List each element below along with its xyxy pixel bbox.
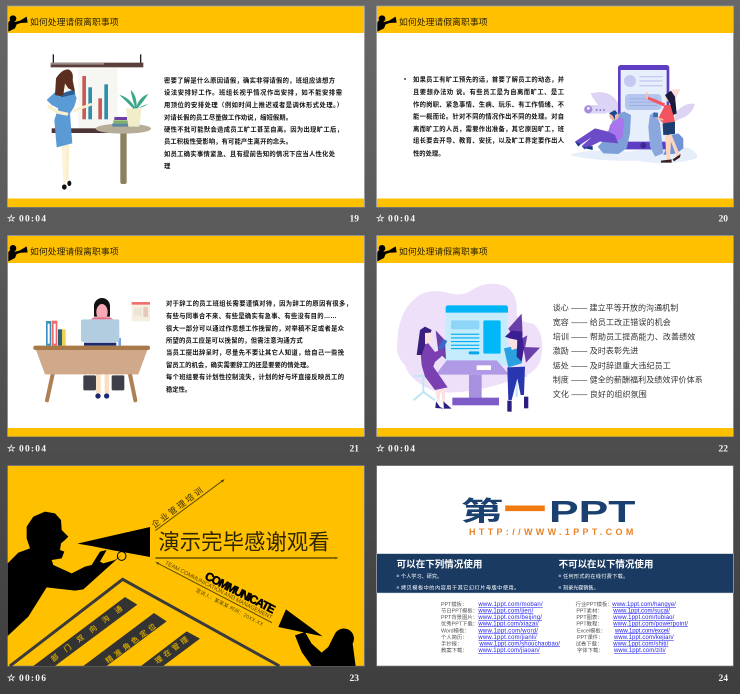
slide number 21: 21 bbox=[350, 444, 359, 454]
left link list: 节日PPT模板： bbox=[441, 606, 478, 614]
slide 20 timer: 00:04 bbox=[388, 214, 415, 224]
heading: 如何处理请假离职事项 bbox=[30, 16, 119, 27]
text block: 所望的员工应是可以挽留的，但需注意沟通方式 bbox=[166, 336, 303, 345]
allowed uses bbox=[397, 559, 519, 592]
closing title: 演示完毕感谢观看 bbox=[158, 530, 330, 554]
right link list: www.1ppt.com/kejian/ bbox=[613, 635, 674, 641]
arrow line with english label: TEAM COMMUNICATION AND MANAGEMENT bbox=[164, 560, 273, 621]
right link list: 字体下载： bbox=[577, 646, 604, 654]
text block: 当员工提出辞呈时，尽量先不要让其它人知道，给自己一些挽 bbox=[166, 348, 345, 357]
slide 21 timer bbox=[7, 444, 46, 454]
right link list: www.1ppt.com/tubiao/ bbox=[612, 615, 675, 621]
left link list: PPT模板： bbox=[441, 600, 467, 608]
left link list: www.1ppt.com/moban/ bbox=[477, 602, 543, 608]
right link list: www.1ppt.com/hangye/ bbox=[611, 602, 676, 608]
stripe: 部门双向沟通: 部门双向沟通 bbox=[49, 603, 125, 664]
allowed uses: 可以在下列情况使用 bbox=[397, 559, 482, 571]
slide 20 timer bbox=[376, 214, 415, 224]
slide 22 timer: 00:04 bbox=[388, 444, 415, 454]
slide 20 timer: ☆ bbox=[376, 214, 385, 224]
slide number 23: 23 bbox=[350, 674, 359, 684]
panel: slide 21 bbox=[8, 236, 364, 436]
prohibited uses: 任何形式的在线付费下载。 bbox=[563, 572, 628, 580]
left link list: 优秀PPT下载： bbox=[441, 619, 478, 627]
text block bbox=[404, 74, 565, 157]
slide 23 timer: 00:06 bbox=[19, 674, 46, 684]
text block: 设法安排好工作。班组长视乎情况作出安排，如不能安排需 bbox=[164, 88, 342, 97]
right link list: www.1ppt.com/ziti/ bbox=[613, 648, 666, 654]
illustration: people with giant phone bbox=[570, 65, 697, 163]
right link list: PPT教程： bbox=[576, 619, 603, 627]
right link list: www.1ppt.com/shiti/ bbox=[612, 641, 669, 647]
silhouette: man with small megaphone bbox=[278, 609, 356, 666]
left link list bbox=[441, 600, 560, 654]
slide number 22: 22 bbox=[718, 444, 728, 454]
text block: 很大一部分可以通过作思想工作挽留的，对举稿不足或者是众 bbox=[166, 323, 345, 332]
right link list: PPT图表： bbox=[576, 613, 603, 621]
panel: slide 22 bbox=[376, 236, 734, 436]
left link list: Word模板： bbox=[441, 626, 470, 634]
left link list: 个人简历： bbox=[441, 633, 468, 641]
text block: 用顶位的安排处理（例如时间上推迟或者是调休形式处理。） bbox=[164, 100, 343, 109]
text list: 谈心 —— 建立平等开放的沟通机制 bbox=[553, 303, 678, 313]
right link list: 试卷下载： bbox=[576, 639, 602, 647]
logo: 第一PPT bbox=[461, 487, 635, 535]
slide number 20: 20 bbox=[718, 214, 728, 224]
slide 19 timer: 00:04 bbox=[19, 214, 46, 224]
panel: slide 23 bbox=[8, 466, 364, 666]
text block: 稳定性。 bbox=[166, 384, 191, 393]
slide 22 timer: ☆ bbox=[376, 444, 385, 454]
illustration: woman at desk bbox=[33, 298, 150, 400]
text block: 且要想办法劝 说。有些员工是为自离而旷工、是工 bbox=[413, 87, 565, 96]
right link list bbox=[576, 600, 688, 654]
text list bbox=[553, 303, 703, 399]
text block: 作的岗职、紧急事情、生病、玩乐、有工作情绪、不 bbox=[413, 99, 565, 108]
left link list: www.1ppt.com/beijing/ bbox=[477, 615, 542, 621]
left link list: 教案下载： bbox=[441, 646, 468, 654]
text block: 离而旷工的人员，需要作出准备，其它原因旷工，班 bbox=[413, 124, 565, 133]
right link list: PPT课件： bbox=[577, 633, 603, 641]
left link list: www.1ppt.com/jianli/ bbox=[477, 635, 537, 641]
illustration: meeting at table bbox=[397, 284, 542, 412]
slide 23 timer: ☆ bbox=[7, 673, 16, 684]
text list: 宽容 —— 给员工改正错误的机会 bbox=[553, 317, 671, 327]
slide 21 timer: ☆ bbox=[7, 444, 16, 454]
stripe: 精准角色定位 bbox=[83, 613, 167, 666]
prohibited uses: 不可以在以下情况使用 bbox=[559, 559, 653, 571]
slide 22 timer bbox=[376, 444, 415, 454]
text list: 激励 —— 及时表彰先进 bbox=[553, 346, 638, 356]
panel: slide 19 bbox=[8, 6, 364, 207]
arrow line with training label: 企业管理培训 bbox=[150, 485, 204, 530]
text block: 硬性不批可能默会造成员工旷工甚至自离。因为出现旷工后， bbox=[164, 125, 343, 134]
slide 23 timer bbox=[7, 673, 46, 684]
text list: 制度 —— 健全的薪酬福利及绩效评价体系 bbox=[553, 375, 703, 385]
panel: slide 24 bbox=[377, 466, 733, 666]
text block: 留员工的机会，确实需要辞工的还是要要的情处理。 bbox=[166, 360, 313, 369]
text block: 组长要去开导、教育、安抚，以及旷工界定要作出人 bbox=[413, 136, 565, 145]
text block: 如果员工有旷工预先的话，首要了解员工的动态，并 bbox=[413, 74, 565, 84]
text block: 密要了解是什么原因请假，确实非得请假的，班组应该想方 bbox=[164, 75, 335, 84]
allowed uses: 拷贝模板中的内容用于其它幻灯片母版中使用。 bbox=[401, 584, 519, 592]
roof outline bbox=[10, 579, 279, 666]
left link list: 手抄报： bbox=[441, 639, 462, 647]
illustration: woman presenting chart bbox=[47, 54, 151, 190]
slide 19 timer: ☆ bbox=[7, 214, 16, 224]
text block: 有些与同事合不来、有些是确实有急事、有些没有目的…… bbox=[166, 311, 337, 320]
right link list: Excel模板： bbox=[577, 626, 606, 634]
title arrow bbox=[155, 557, 339, 559]
icon: megaphone man bbox=[377, 245, 397, 261]
left link list: PPT背景图片： bbox=[441, 613, 478, 621]
communicate wordmark: COMMUNICATE bbox=[203, 570, 278, 617]
heading: 如何处理请假离职事项 bbox=[399, 16, 488, 27]
heading: 如何处理请假离职事项 bbox=[399, 246, 488, 256]
text list: 培训 —— 帮助员工提高能力、改善绩效 bbox=[553, 331, 695, 341]
text list: 惩处 —— 及时辞退重大违纪员工 bbox=[553, 360, 671, 370]
text block: 能一概而论。针对不同的情况作出不同的处理。对自 bbox=[413, 112, 564, 121]
logo: 第一PPT: PPT bbox=[549, 495, 635, 529]
stripe: 理在管理 bbox=[141, 631, 200, 666]
text block: 如员工确实事情紧急、且有提前告知的情况下应当人性化处 bbox=[164, 149, 336, 158]
text block bbox=[166, 299, 352, 393]
text block: 性的处理。 bbox=[413, 148, 444, 157]
left link list: www.1ppt.com/word/ bbox=[477, 628, 538, 634]
left link list: www.1ppt.com/xiazai/ bbox=[477, 621, 539, 627]
slide 19 timer bbox=[7, 214, 46, 224]
arrow line with training label bbox=[150, 479, 225, 531]
slide 21 timer: 00:04 bbox=[19, 444, 46, 454]
heading: 如何处理请假离职事项 bbox=[30, 246, 119, 256]
logo: 第一PPT: 第 bbox=[461, 497, 503, 527]
stripe: 部门双向沟通 bbox=[33, 597, 137, 666]
right link list: www.1ppt.com/powerpoint/ bbox=[612, 621, 688, 627]
slide number 19: 19 bbox=[350, 214, 359, 224]
text block: 每个班组要有计划性控制流失，计划的好与坏直接反映员工的 bbox=[166, 372, 344, 381]
text block: 员工积极性受影响，有可能产生离开的念头。 bbox=[164, 137, 292, 146]
icon: megaphone man bbox=[8, 245, 28, 261]
presenter line: 宣讲人：某某某 时间：20XX.XX bbox=[194, 587, 265, 628]
left link list: www.1ppt.com/jieri/ bbox=[477, 608, 534, 614]
right link list: www.1ppt.com/excel/ bbox=[614, 628, 670, 634]
stripe: 精准角色定位: 精准角色定位 bbox=[104, 622, 158, 665]
right link list: 行业PPT模板： bbox=[576, 600, 613, 608]
icon: megaphone man bbox=[377, 15, 397, 32]
right link list: www.1ppt.com/sucai/ bbox=[612, 608, 670, 614]
allowed uses: 个人学习、研究。 bbox=[401, 572, 442, 580]
silhouette: man with large megaphone bbox=[8, 512, 150, 636]
logo: 第一PPT: 一 bbox=[504, 487, 546, 535]
text block bbox=[164, 75, 343, 170]
logo url: HTTP://WWW.1PPT.COM bbox=[469, 527, 633, 537]
icon: megaphone man bbox=[8, 15, 28, 32]
right link list: PPT素材： bbox=[576, 606, 603, 614]
navy usage band bbox=[377, 554, 733, 593]
stripe: 理在管理: 理在管理 bbox=[153, 634, 190, 666]
text block: 对请长假的员工尽量做工作劝说，缩短假期。 bbox=[164, 112, 292, 121]
prohibited uses bbox=[559, 559, 653, 592]
left link list: www.1ppt.com/shouchaobao/ bbox=[478, 641, 560, 647]
left link list: www.1ppt.com/jiaoan/ bbox=[477, 648, 540, 654]
text block: 对于辞工的员工班组长需要谨慎对待，因为辞工的原因有很多， bbox=[166, 299, 352, 308]
panel: slide 20 bbox=[376, 6, 734, 207]
text list: 文化 —— 良好的组织氛围 bbox=[553, 389, 647, 399]
prohibited uses: 刻录光碟销售。 bbox=[563, 584, 599, 592]
text block: 理 bbox=[164, 162, 171, 170]
slide number 24: 24 bbox=[718, 674, 728, 684]
